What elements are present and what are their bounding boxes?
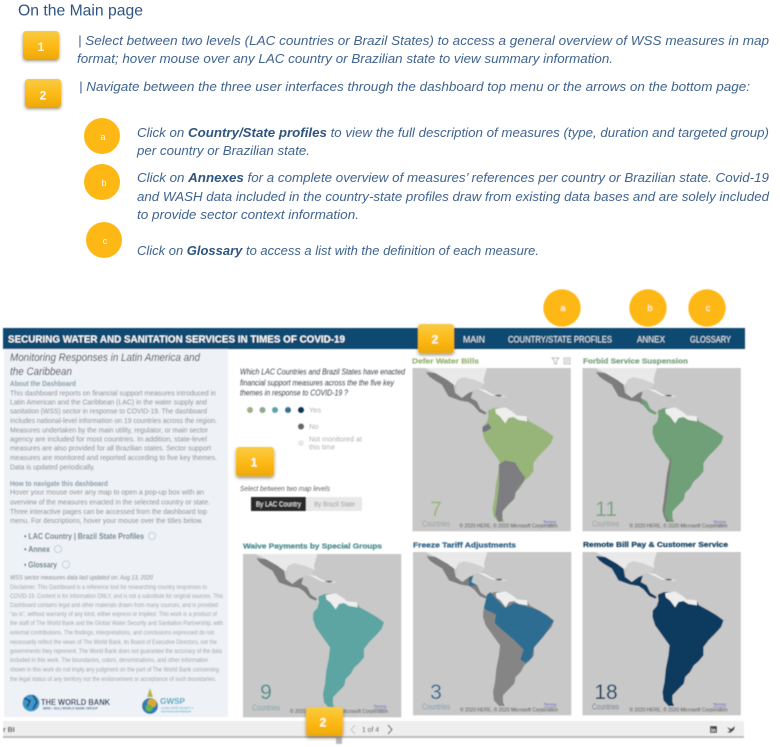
nav badge 2: [418, 324, 454, 353]
map panel: Remote Bill Pay & Customer Service: © 2020 HERE, © 2020 Microsoft Corporation: [630, 706, 728, 714]
about the dashboard: About the Dashboard: [10, 379, 76, 388]
disclaimer: the legal status of any territory nor the endorsement or acceptance of such boundaries.: [10, 677, 216, 683]
about the dashboard: [10, 379, 217, 472]
legend: No: [309, 422, 318, 431]
map panel: Waive Payments by Special Groups: Countries: [252, 704, 280, 712]
nav menu: MAIN: [463, 334, 485, 344]
map panel: Defer Water Bills: © 2020 HERE, © 2020 Microsoft Corporation: [460, 522, 558, 530]
map panel: Forbid Service Suspension: [582, 356, 741, 531]
bottom pagination bar: [3, 721, 744, 738]
map panel: Freeze Tariff Adjustments: 3: [430, 681, 442, 704]
instructions section: [18, 2, 770, 258]
panel title: Monitoring Responses in Latin America and: [10, 352, 201, 364]
map level selector: By LAC Country: [256, 500, 301, 508]
instruction 1 text: | Select between two levels (LAC countries or Brazil States) to access a general overview of WSS measures in map: [78, 33, 769, 48]
step a text: Click on Country/State profiles to view the full description of measures (type, duration and targeted group): [137, 125, 769, 140]
about the dashboard: includes national-level information on 19 countries across the region.: [10, 416, 217, 425]
page links: • LAC Country | Brazil State Profiles: [24, 531, 144, 541]
logo: World Bank: [22, 694, 111, 712]
top circle a: a: [560, 303, 566, 313]
disclaimer: included in this work. The boundaries, colors, denominations, and other information: [10, 658, 208, 664]
how to navigate: How to navigate this dashboard: [10, 479, 108, 488]
badge 1 on dashboard: 1: [251, 456, 258, 470]
disclaimer: COVID-19. Content is for information ONLY, and is not a substitute for original sources. This: [10, 594, 223, 600]
nav menu: ANNEX: [637, 334, 665, 344]
map panel: Forbid Service Suspension: Countries: [592, 520, 619, 528]
about the dashboard: measures are monitored and reported according to five key themes.: [10, 453, 217, 462]
map level selector: [240, 484, 362, 511]
badge 1: 1: [38, 40, 45, 54]
disclaimer: shown in this work do not imply any judgment on the part of The World Bank concerning: [10, 668, 219, 674]
circle a: a: [100, 132, 106, 142]
step a text: [136, 125, 769, 158]
map panel: Remote Bill Pay & Customer Service: Countries: [592, 702, 619, 712]
map level selector: Select between two map levels: [240, 484, 330, 493]
map panel: Forbid Service Suspension: Forbid Service Suspension: [583, 356, 688, 366]
panel title: [10, 352, 201, 378]
bottom pagination bar: r BI: [3, 727, 15, 734]
map panel: Freeze Tariff Adjustments: Freeze Tariff Adjustments: [413, 540, 516, 550]
step b text: to provide sector context information.: [137, 207, 359, 222]
circle c: [86, 222, 122, 258]
map panel: Waive Payments by Special Groups: © 2020 HERE, © 2020 Microsoft Corporation: [290, 708, 388, 715]
map panel: Defer Water Bills: Terms: [543, 520, 557, 526]
circle b: b: [101, 178, 107, 188]
map question: themes in response to COVID-19 ?: [240, 388, 348, 398]
map question: Which LAC Countries and Brazil States have enacted: [240, 366, 405, 376]
logo: World Bank: THE WORLD BANK: [41, 697, 111, 707]
how to navigate: Three interactive pages can be accessed from the dashboard top: [10, 507, 207, 516]
top circle b: [629, 289, 667, 327]
share icons: [710, 726, 735, 734]
page indicator: 1 of 4: [362, 727, 379, 734]
page links: • Glossary: [24, 560, 57, 570]
map panel: Freeze Tariff Adjustments: Countries: [422, 702, 450, 712]
badge 2: [25, 79, 61, 107]
bottom badge 2: [306, 707, 343, 744]
dashboard header bar: [3, 328, 745, 349]
circle a: [84, 118, 120, 154]
map panel: Forbid Service Suspension: © 2020 HERE, © 2020 Microsoft Corporation: [630, 522, 728, 530]
disclaimer: Disclaimer. This Dashboard is a reference tool for researching country responses to: [10, 585, 208, 591]
map panel: Waive Payments by Special Groups: Terms: [374, 704, 387, 710]
map panel: Waive Payments by Special Groups: Waive Payments by Special Groups: [243, 542, 382, 550]
nav badge 2: 2: [432, 332, 439, 346]
map question: financial support measures across the the five key: [240, 378, 395, 388]
instruction 1 text: format; hover mouse over any LAC country or Brazilian state to view summary information.: [77, 51, 613, 66]
map question: [240, 366, 405, 398]
heading: On the Main page: On the Main page: [18, 2, 143, 20]
disclaimer: Dashboard contains legal and other materials drawn from many sources, and is provided: [10, 603, 218, 609]
disclaimer: “as is”, without warranty of any kind, either express or implied. This work is a product of: [10, 612, 217, 618]
top circle c: c: [706, 303, 711, 313]
logo: GWSP: SANITATION PARTNERSHIP: [161, 710, 191, 714]
about the dashboard: sanitation (WSS) sector in response to COVID-19. The dashboard: [10, 407, 207, 416]
disclaimer: governments they represent. The World Bank does not guarantee the accuracy of the data: [10, 649, 223, 655]
map panel: Remote Bill Pay & Customer Service: Terms: [713, 702, 727, 708]
map panel: Remote Bill Pay & Customer Service: Remote Bill Pay & Customer Service: [583, 540, 728, 549]
step b text: Click on Annexes for a complete overview of measures’ references per country or Brazilian state. Covid-19: [137, 170, 769, 185]
legend: this time: [309, 442, 335, 452]
circle b: [84, 164, 120, 200]
legend: Yes: [309, 406, 321, 414]
about the dashboard: measures are also provided for all Brazilian states. Sector support: [10, 444, 212, 453]
dashboard screenshot: [3, 289, 745, 744]
page links: [24, 531, 156, 570]
about the dashboard: Measures undertaken by the main utility, regulator, or main sector: [10, 425, 208, 434]
map panel: Forbid Service Suspension: Terms: [713, 520, 727, 526]
nav menu: GLOSSARY: [690, 334, 731, 344]
top circle a: [543, 289, 581, 327]
how to navigate: [10, 479, 210, 525]
step b text: [137, 170, 770, 222]
instruction 1 text: [77, 33, 769, 66]
map panel: Freeze Tariff Adjustments: Terms: [544, 702, 557, 708]
map panel: Waive Payments by Special Groups: 9: [260, 681, 272, 704]
top circle c: [688, 289, 726, 327]
dashboard title: SECURING WATER AND SANITATION SERVICES IN TIMES OF COVID-19: [8, 334, 345, 346]
nav menu: COUNTRY/STATE PROFILES: [508, 334, 612, 344]
map panel: Remote Bill Pay & Customer Service: 18: [594, 681, 618, 704]
how to navigate: overview of the measures enacted in the selected country or state.: [10, 497, 210, 506]
map panel: Freeze Tariff Adjustments: © 2020 HERE, © 2020 Microsoft Corporation: [460, 706, 558, 714]
disclaimer: [10, 585, 223, 683]
map panel: Remote Bill Pay & Customer Service: [582, 540, 741, 715]
map panel: Defer Water Bills: Defer Water Bills: [412, 356, 479, 366]
map panel: Defer Water Bills: [412, 356, 571, 531]
logo: World Bank: IBRD • IDA | WORLD BANK GROUP: [43, 706, 99, 710]
logo: GWSP: [142, 688, 193, 714]
about the dashboard: This dashboard reports on financial support measures introduced in: [10, 388, 216, 398]
logo: GWSP: GWSP: [160, 696, 185, 706]
last updated note: WSS sector measures data last updated on: Aug 13, 2020: [10, 574, 153, 582]
instruction 2 text: | Navigate between the three user interfaces through the dashboard top menu or the arrows on the bottom page:: [79, 79, 750, 94]
filter icons: [552, 358, 570, 364]
badge 1 on dashboard: [236, 447, 274, 476]
disclaimer: external contributions. The findings, interpretations, and conclusions expressed do not: [10, 631, 214, 637]
how to navigate: menu. For descriptions, hover your mouse over the titles below.: [10, 516, 203, 525]
disclaimer: the staff of The World Bank and the Global Water Security and Sanitation Partnership, with: [10, 621, 223, 627]
how to navigate: Hover your mouse over any map to open a pop-up box with an: [10, 488, 204, 497]
legend: [247, 406, 362, 452]
about the dashboard: agency are included for most countries. In addition, state-level: [10, 435, 207, 444]
top circle b: b: [647, 303, 653, 313]
logo: GWSP: GLOBAL WATER SECURITY &: [161, 706, 193, 710]
badge 2: 2: [40, 88, 47, 102]
map panel: Waive Payments by Special Groups: [243, 542, 401, 717]
badge 1: [23, 31, 59, 59]
about the dashboard: Latin American and the Caribbean (LAC) in the water supply and: [10, 398, 207, 407]
bottom badge 2: 2: [320, 716, 327, 730]
map panel: Freeze Tariff Adjustments: [413, 540, 571, 715]
map level selector: By Brazil State: [314, 500, 355, 508]
page links: • Annex: [24, 544, 50, 554]
map panel: Defer Water Bills: Countries: [422, 520, 450, 528]
nav menu: [463, 334, 731, 344]
panel title: the Caribbean: [10, 366, 72, 378]
about the dashboard: Data is updated periodically.: [10, 462, 95, 472]
step b text: and WASH data included in the country-state profiles draw from existing data bases and are solely included: [137, 189, 770, 204]
map panel: Forbid Service Suspension: 11: [595, 498, 617, 521]
step c text: Click on Glossary to access a list with the definition of each measure.: [137, 243, 539, 258]
page indicator: [351, 725, 392, 734]
left panel: [4, 349, 228, 717]
map panel: Defer Water Bills: 7: [430, 498, 442, 521]
disclaimer: necessarily reflect the views of The World Bank, its Board of Executive Directors, nor the: [10, 640, 218, 646]
legend: Not monitored at: [309, 434, 362, 444]
step a text: per country or Brazilian state.: [136, 143, 310, 158]
circle c: c: [103, 236, 108, 246]
share icons: in: [711, 728, 717, 734]
